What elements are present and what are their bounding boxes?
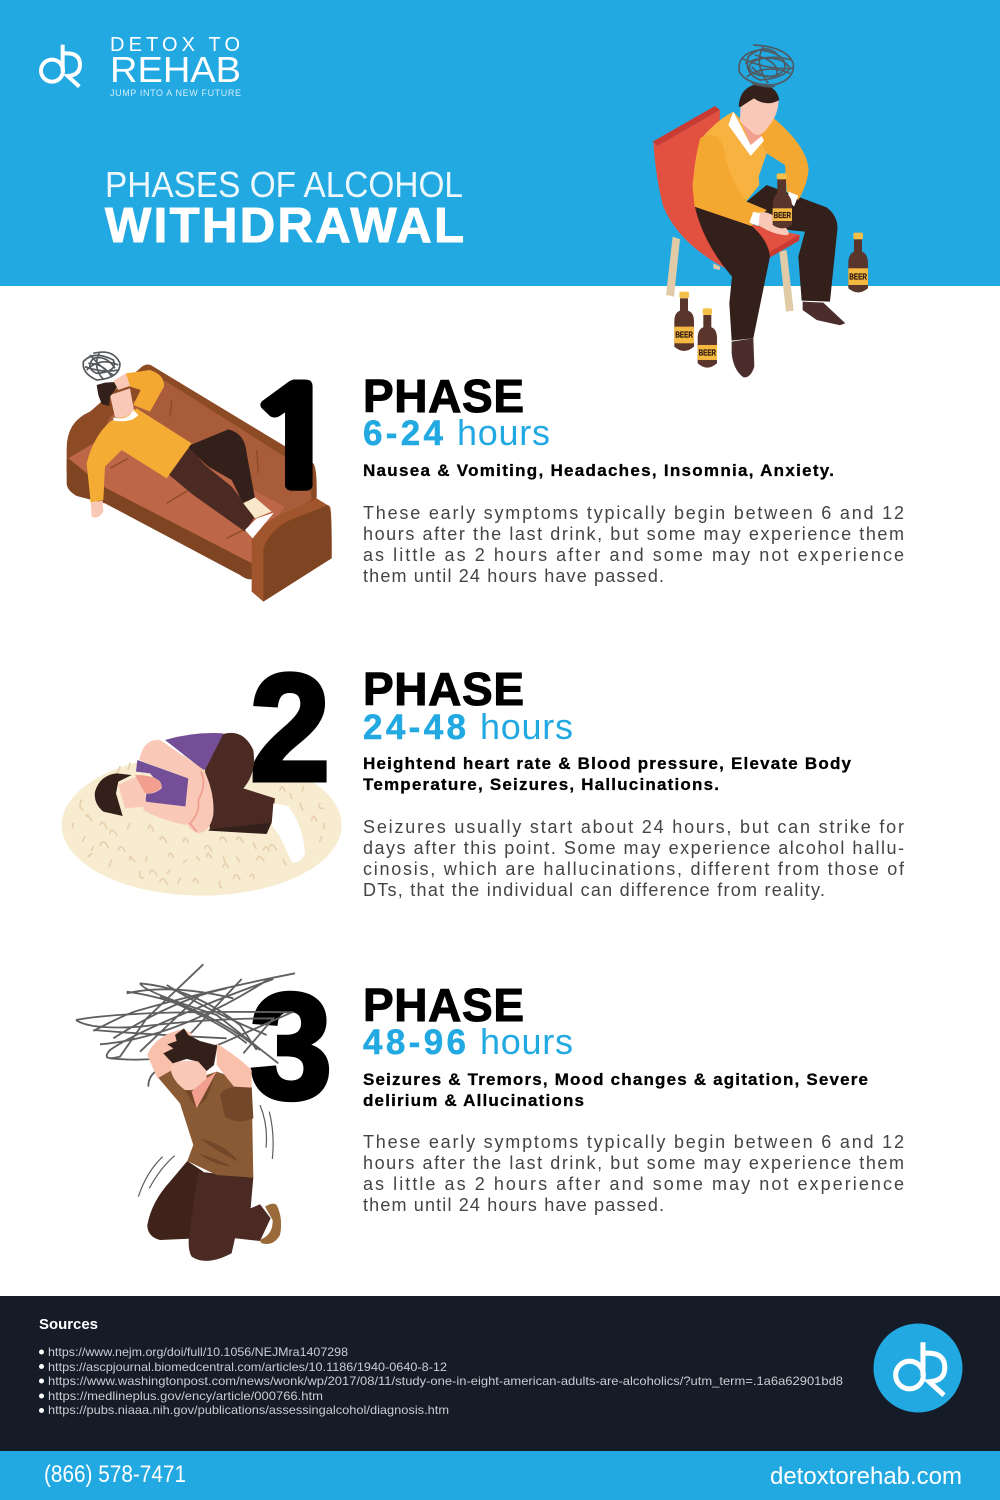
phase 3 text: hours after the last drink, but some may experience them (363, 1153, 904, 1173)
phase 3 text: 48-96 (363, 1023, 466, 1062)
head (740, 98, 779, 135)
shoe (259, 1204, 281, 1244)
chair (653, 106, 800, 273)
illustration: man on sofa (67, 352, 347, 602)
bottle middle: BEER (699, 348, 716, 357)
forearm and neck (118, 775, 162, 808)
hair (95, 773, 132, 816)
phase 1 text: hours (457, 412, 550, 453)
sofa back (67, 365, 317, 573)
sofa arm (252, 498, 332, 602)
arms (147, 1029, 252, 1088)
neck (739, 117, 762, 145)
header band (0, 0, 1000, 286)
bottle in hand: BEER (774, 211, 791, 220)
phase 2 text: Seizures usually start about 24 hours, but can strike for (363, 817, 904, 837)
collar (183, 1072, 217, 1108)
scribble (76, 964, 295, 1087)
phase 3 text (363, 979, 904, 1215)
scribble (83, 352, 120, 380)
sources list: https://www.washingtonpost.com/news/wonk/wp/2017/08/11/study-one-in-eight-american-adults-are-alcoholics/?utm_term=.1a6a62901bd8 (48, 1374, 843, 1388)
website: detoxtorehab.com (770, 1463, 962, 1490)
phase 2 text: Temperature, Seizures, Hallucinations. (363, 775, 719, 794)
logo mark (41, 45, 80, 87)
arm (139, 740, 214, 833)
logo wordmark (110, 34, 241, 98)
sources list: https://medlineplus.gov/ency/article/000766.htm (48, 1389, 323, 1403)
phase 2 text: Heightend heart rate & Blood pressure, Elevate Body (363, 754, 852, 773)
phone number: (866) 578-7471 (44, 1461, 186, 1488)
logo wordmark: DETOX TO (110, 34, 240, 56)
trousers (205, 733, 275, 834)
phase 2 text: PHASE (363, 663, 524, 715)
scribble (739, 45, 793, 87)
phase 1 text: hours after the last drink, but some may experience them (363, 524, 904, 544)
illustration: kneeling man with scribble (76, 964, 295, 1261)
sources list: https://ascpjournal.biomedcentral.com/articles/10.1186/1940-0640-8-12 (48, 1360, 447, 1374)
phase 3 text: These early symptoms typically begin between 6 and 12 (363, 1132, 904, 1152)
bottle left: BEER (675, 331, 693, 340)
illustration: seated man with beer (653, 45, 868, 377)
trousers (167, 429, 255, 532)
phase 3 text: them until 24 hours have passed. (363, 1195, 664, 1215)
phase 2 text: cinosis, which are hallucinations, different from those of (363, 859, 905, 879)
sources list: https://pubs.niaaa.nih.gov/publications/assessingalcohol/diagnosis.htm (48, 1403, 449, 1417)
face and neck (171, 1060, 217, 1108)
contact bar (0, 1451, 1000, 1500)
phase 2 text (363, 663, 905, 900)
number one: 1 (243, 373, 347, 508)
raised arm (126, 370, 164, 412)
collar (728, 112, 764, 156)
trousers (695, 185, 837, 341)
title (105, 164, 464, 253)
shirt (136, 733, 223, 809)
hair (97, 382, 122, 406)
number three: 3 (250, 962, 332, 1130)
phase 1 text: Nausea & Vomiting, Headaches, Insomnia, Anxiety. (363, 461, 834, 480)
sources list (39, 1345, 843, 1417)
logo wordmark: JUMP INTO A NEW FUTURE (110, 88, 241, 98)
sources heading: Sources (39, 1316, 98, 1333)
phase 2 text: DTs, that the individual can difference from reality. (363, 880, 825, 900)
phase 1 text: them until 24 hours have passed. (363, 566, 664, 586)
bottle right: BEER (849, 272, 867, 281)
rug shape (62, 754, 342, 896)
phase 1 text: as little as 2 hours after and some may not experience (363, 545, 904, 565)
rug tufts (72, 763, 324, 888)
bottle left (674, 292, 694, 351)
hair (739, 84, 779, 107)
socks (243, 497, 274, 538)
collar (113, 410, 138, 421)
phase 3 text: hours (480, 1021, 573, 1062)
phase 2 text: hours (480, 706, 573, 747)
motion lines (138, 1105, 273, 1197)
illustration: man curled on rug (95, 733, 305, 862)
sweater (693, 112, 809, 226)
sofa creases (110, 400, 258, 538)
sources panel (0, 1296, 1000, 1451)
hand and cuff (749, 192, 798, 235)
sources list: https://www.nejm.org/doi/full/10.1056/NEJMra1407298 (48, 1345, 348, 1359)
shoes (732, 302, 845, 377)
phase 3 text: Seizures & Tremors, Mood changes & agitation, Severe (363, 1070, 868, 1089)
illustration: rug (62, 754, 342, 896)
phase 3 text: as little as 2 hours after and some may not experience (363, 1174, 904, 1194)
sofa seat (68, 430, 285, 564)
phase 3 text: delirium & Allucinations (363, 1091, 584, 1110)
phase 3 text: PHASE (363, 979, 524, 1031)
title: WITHDRAWAL (105, 199, 464, 253)
phase 1 text: 6-24 (363, 414, 444, 453)
phase 1 text: PHASE (363, 370, 524, 422)
shirt (157, 1065, 253, 1178)
phase 1 text: These early symptoms typically begin between 6 and 12 (363, 503, 904, 523)
phase 2 text: 24-48 (363, 708, 466, 747)
phase 1 text (363, 370, 904, 586)
number two: 2 (250, 643, 330, 813)
sock (272, 803, 305, 862)
scar line (190, 772, 203, 832)
head (110, 388, 134, 418)
bottle in hand (773, 173, 792, 228)
logo wordmark: REHAB (110, 49, 241, 90)
hands (91, 373, 130, 518)
chair legs (666, 237, 794, 312)
title: PHASES OF ALCOHOL (105, 164, 463, 205)
footer logo badge (874, 1324, 962, 1412)
phase 2 text: days after this point. Some may experience alcohol hallu- (363, 838, 904, 858)
trousers (147, 1161, 271, 1261)
bottle right (848, 233, 868, 292)
hand and chest (143, 802, 190, 825)
hair (163, 1028, 217, 1071)
sweater (87, 408, 192, 503)
bottle middle (698, 308, 717, 368)
sofa cushion back (100, 381, 312, 540)
sofa front (67, 458, 253, 579)
